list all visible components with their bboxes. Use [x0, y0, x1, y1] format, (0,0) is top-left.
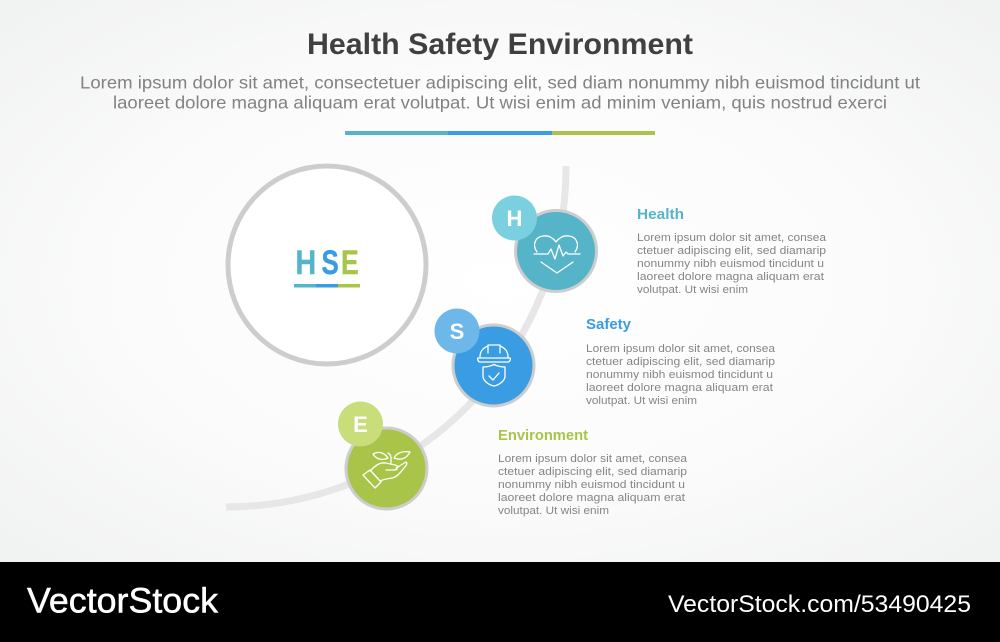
text block: Safety: nonummy nibh euismod tincidunt u	[586, 369, 773, 381]
subtitle: laoreet dolore magna aliquam erat volutpat. Ut wisi enim ad minim veniam, quis nostrud exerci	[113, 92, 887, 112]
text block: Health: ctetuer adipiscing elit, sed diamarip	[637, 245, 826, 257]
text block: Safety: Lorem ipsum dolor sit amet, consea	[586, 343, 776, 355]
main circle: HSE	[228, 166, 426, 364]
text block: Health	[637, 206, 827, 296]
title: Health Safety Environment	[307, 28, 693, 61]
text block: Safety: Safety	[586, 316, 632, 333]
text block: Environment: volutpat. Ut wisi enim	[498, 505, 609, 517]
HSE label: S	[322, 245, 339, 282]
node: Environment	[338, 402, 427, 509]
curved path	[226, 166, 566, 507]
text block: Health: nonummy nibh euismod tincidunt u	[637, 258, 824, 270]
text block: Environment: ctetuer adipiscing elit, sed diamarip	[498, 466, 687, 478]
icon: helmet and shield	[478, 345, 510, 386]
text block: Environment: nonummy nibh euismod tincidunt u	[498, 479, 685, 491]
text block: Environment: Lorem ipsum dolor sit amet, consea	[498, 453, 688, 465]
text block: Safety: ctetuer adipiscing elit, sed diamarip	[586, 356, 775, 368]
text block: Environment: laoreet dolore magna aliquam erat	[498, 492, 685, 504]
icon: heart with pulse	[534, 236, 580, 273]
text block: Health: Lorem ipsum dolor sit amet, consea	[637, 232, 827, 244]
footer brand: VectorStock	[27, 582, 219, 620]
text block: Safety: laoreet dolore magna aliquam erat	[586, 382, 773, 394]
HSE label: H	[296, 244, 316, 282]
node: Health	[492, 196, 596, 292]
text block: Health: Health	[637, 206, 684, 223]
badge: H: H	[507, 206, 522, 231]
text block: Environment: Environment	[498, 427, 588, 444]
footer image id: VectorStock.com/53490425	[668, 591, 971, 618]
badge: E: E	[353, 412, 368, 437]
HSE label	[296, 244, 359, 282]
icon: hand with plant	[363, 452, 410, 488]
node: Safety	[434, 308, 534, 406]
footer bar	[0, 562, 1000, 642]
text block: Environment	[498, 427, 688, 517]
HSE label: E	[341, 244, 359, 282]
text block: Safety	[586, 316, 776, 407]
HSE underline	[294, 284, 360, 288]
badge: S: S	[450, 319, 464, 344]
text block: Safety: volutpat. Ut wisi enim	[586, 395, 697, 407]
subtitle: Lorem ipsum dolor sit amet, consectetuer adipiscing elit, sed diam nonummy nibh euismod tincidunt ut	[80, 72, 920, 92]
text block: Health: laoreet dolore magna aliquam erat	[637, 271, 824, 283]
text block: Health: volutpat. Ut wisi enim	[637, 284, 748, 296]
title divider	[345, 131, 655, 135]
subtitle	[80, 72, 920, 112]
